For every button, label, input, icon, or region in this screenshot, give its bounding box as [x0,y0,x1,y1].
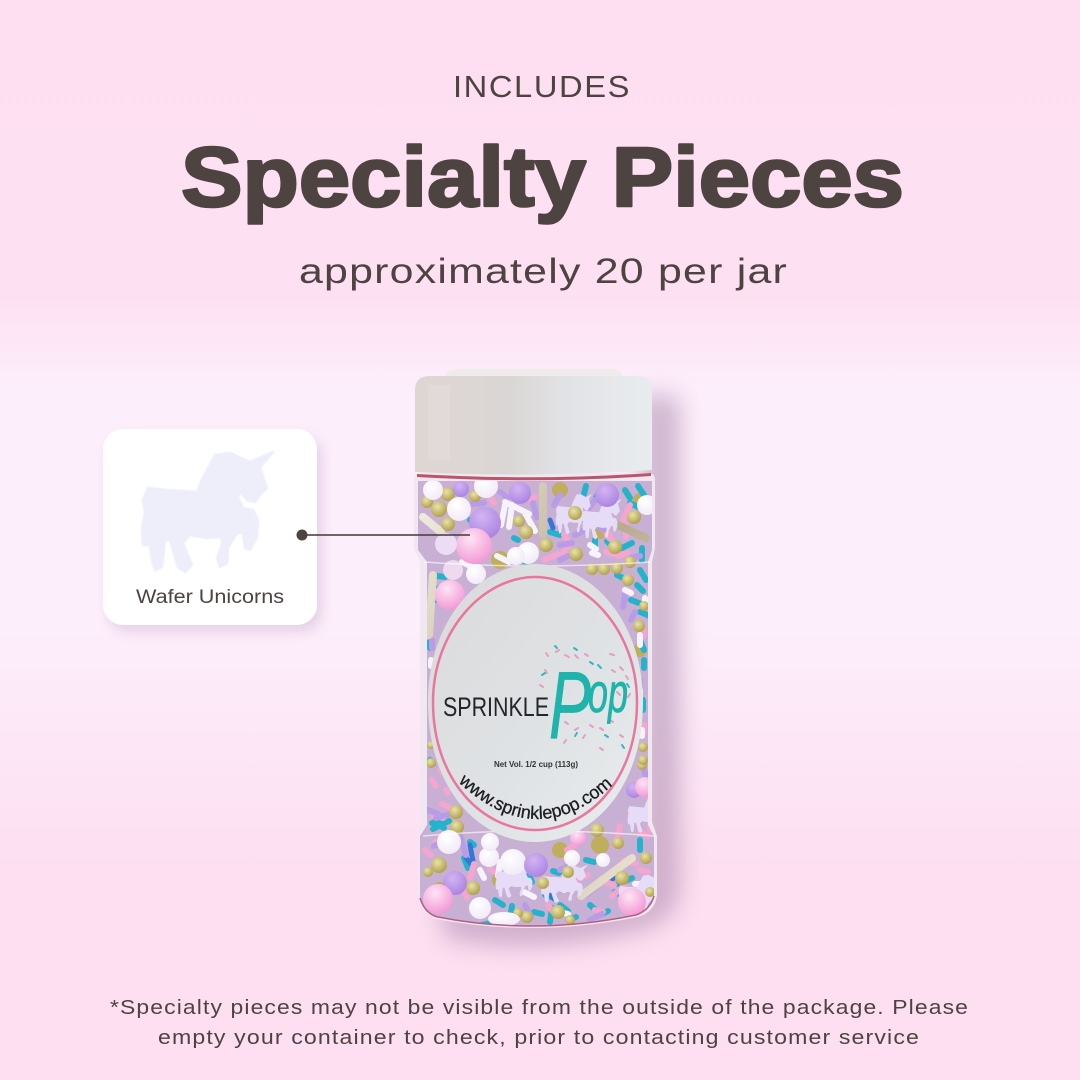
cap [415,369,652,480]
subtitle: approximately 20 per jar [299,252,788,291]
brand: Sprinkle: SPRINKLE [443,692,549,722]
eyebrow heading: INCLUDES [453,69,631,104]
callout connector [296,530,470,540]
brand: Pop, letters op: op [588,661,628,724]
confetti dots on label [540,650,630,750]
net volume: Net Vol. 1/2 cup (113g) [494,760,578,769]
footnote: empty your container to check, prior to contacting customer service [158,1026,920,1049]
title: Specialty Pieces [181,130,904,224]
pink jimmies [425,495,650,913]
royal blue jimmies [466,520,632,899]
white jimmies [431,502,653,914]
pearls: pink and lilac [423,528,655,916]
footnote [110,996,969,1049]
pearls: purple [443,481,642,895]
pearls: white [423,474,657,926]
brand: Pop, letter P: P [549,652,591,759]
teal and blue jimmies [427,486,650,925]
wafer unicorns [495,494,667,913]
lilac jimmies [428,492,646,920]
jar contents: sprinkles [415,474,667,930]
jar shadow [440,395,680,946]
gold base layer [432,482,647,898]
product jar [414,369,657,928]
footnote: *Specialty pieces may not be visible from the outside of the package. Please [110,996,969,1019]
glass body [414,473,657,928]
callout card: wafer unicorns [103,429,322,632]
card label: Wafer Unicorns [136,587,284,608]
icon: wafer unicorn [142,452,273,572]
label [428,564,643,842]
glass highlights [423,562,655,836]
website [456,776,622,819]
gold pearls [421,487,655,925]
silver rods [423,486,646,896]
label: www.sprinklepop.com [460,774,612,822]
